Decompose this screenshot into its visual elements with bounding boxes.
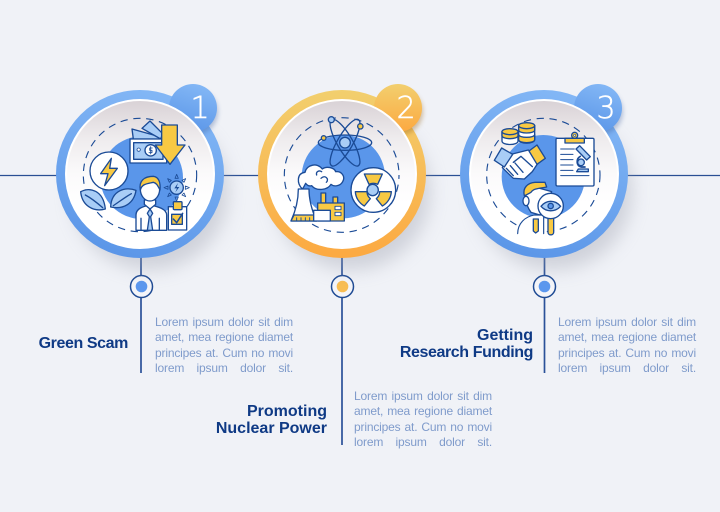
circle 1: green scam [56,84,228,270]
body text 3: Lorem ipsum dolor sit dim [558,315,696,329]
circle 2: nuclear power [258,84,430,270]
heading: Getting Research Funding [400,327,533,360]
body text 1: Lorem ipsum dolor sit dim [155,315,293,329]
body text 3: lorem ipsum dolor sit. [558,361,696,375]
body text 2: Lorem ipsum dolor sit dim [354,389,492,403]
clipboard [556,138,594,186]
microscope [576,146,590,160]
heading: Promoting Nuclear Power: Nuclear Power [216,420,327,436]
vertical connector 1 [140,255,142,373]
node marker 2 [332,276,354,298]
body text 2: principes at. Cum no movi [354,420,492,434]
cooling tower [291,189,317,221]
money [132,129,161,139]
body text 1: principes at. Cum no movi [155,346,293,360]
arrow [155,125,185,164]
node marker 3 [534,276,556,298]
circle 3: research funding [460,84,632,270]
body text 1: lorem ipsum dolor sit. [155,361,293,375]
smoke cloud [298,165,344,189]
body text 1 [155,315,294,375]
handshake [502,150,540,179]
heading: Green Scam: Green Scam [39,335,128,352]
coins [502,132,518,144]
body text 2: lorem ipsum dolor sit. [354,435,492,449]
body text 1: amet, mea regione diamet [155,330,293,344]
body text 3 [558,315,696,375]
atom [318,135,372,150]
node marker 1 [130,276,152,298]
heading: Getting Research Funding: Getting [477,327,533,344]
leaves [81,190,105,210]
heading: Promoting Nuclear Power: Promoting [247,403,327,420]
sun [170,181,183,194]
badge 2 [374,84,423,135]
person [518,215,544,234]
icon: coins, handshake, clipboard, person [487,118,600,235]
body text 2: amet, mea regione diamet [354,404,492,418]
vertical connector 2 [341,255,343,445]
body text 2 [354,389,492,449]
horizontal timeline [0,174,720,176]
radiation sign [351,168,396,212]
icon: atom, tower, factory, radiation [284,116,399,232]
badge 3 [574,84,623,135]
heading: Promoting Nuclear Power [216,403,327,436]
magnifier [548,218,554,235]
number 1: 1 [190,91,210,126]
lightning [90,152,128,190]
clipboard [168,207,187,230]
number 2: 2 [396,91,416,126]
number 3: 3 [596,91,616,126]
person [136,205,167,230]
body text 3: amet, mea regione diamet [558,330,696,344]
factory [321,193,326,203]
icon: energy, money, businessman [81,118,197,232]
badge 1 [169,84,218,135]
body text 3: principes at. Cum no movi [558,346,696,360]
vertical connector 3 [544,255,546,373]
heading: Getting Research Funding: Research Funding [400,344,533,360]
